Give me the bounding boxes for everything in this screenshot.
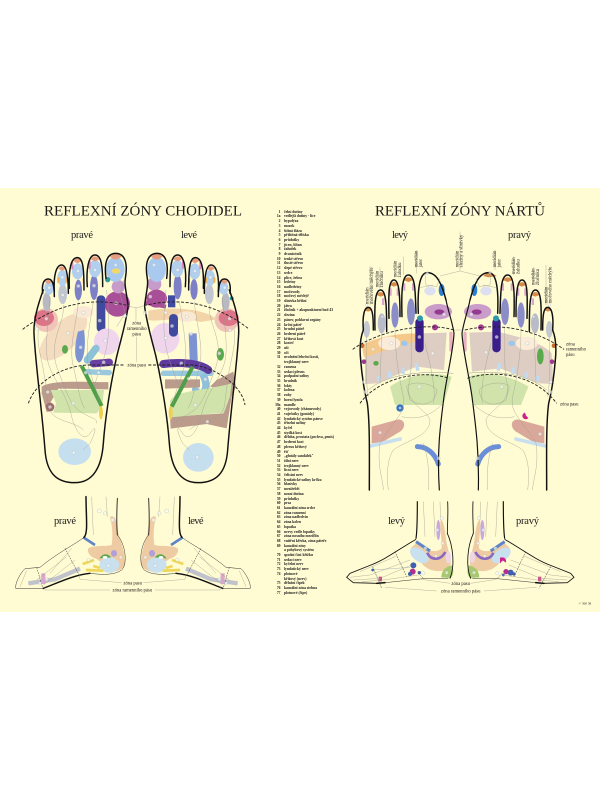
legend list: srdce [284, 271, 292, 275]
label: pravé side: pravé [54, 516, 76, 527]
legend list: mezižebří [284, 487, 299, 491]
waist and shoulder zone lines [353, 232, 564, 403]
legend list: 3 [279, 224, 280, 228]
legend list: příštítná tělíska [284, 233, 309, 237]
meridian labels: močového měchýře [370, 267, 375, 304]
legend list: ledviny [284, 280, 295, 284]
legend list: a pohybový systém [284, 548, 314, 552]
legend list: čelistní nerv [284, 473, 303, 477]
legend list: prsa [284, 501, 291, 505]
legend list: 22 [277, 313, 280, 317]
legend list: 73 [277, 567, 280, 571]
legend list: 45 [277, 431, 280, 435]
legend list: nervy vedle lopatky [284, 530, 315, 534]
legend list: 10 [277, 257, 280, 261]
label: zóna ramenního pásu: pásu [132, 333, 142, 338]
legend list: oči [284, 351, 289, 355]
legend list: 75 [277, 581, 280, 585]
meridian labels: meridián [366, 287, 371, 304]
label: levý: levý [392, 230, 409, 241]
legend list: lymfatický nerv [284, 567, 309, 571]
legend list: kauzální zóna stehna [284, 586, 317, 590]
legend list: 38 [277, 393, 280, 397]
legend list: 52 [277, 464, 280, 468]
legend list: lícní nerv [284, 468, 299, 472]
legend list: 41 [277, 412, 280, 416]
right outer foot [467, 502, 574, 588]
legend list: 27 [277, 337, 280, 341]
legend list: 13 [277, 271, 280, 275]
legend list: podpažní uzliny [284, 374, 309, 378]
legend list: 65 [277, 525, 280, 529]
legend list: 15 [277, 280, 280, 284]
right inner foot [16, 497, 125, 590]
legend list: 71 [277, 558, 280, 562]
legend list: lopatka [284, 525, 296, 529]
legend list: 12 [277, 266, 280, 270]
legend list: žlučník + akupunkturní bod 43 [284, 308, 333, 312]
legend list: řiť [284, 450, 289, 454]
legend list: 1 [279, 210, 280, 214]
legend list: 70 [277, 553, 280, 557]
legend list: kauzální zóna srdce [284, 506, 315, 510]
side views outer [347, 502, 592, 605]
legend list: 46 [277, 435, 280, 439]
legend list: 19 [277, 299, 280, 303]
legend list: močový měchýř [284, 294, 309, 298]
meridian labels: jater [497, 259, 502, 268]
title: nárty: REFLEXNÍ ZÓNY NÁRTŮ [375, 202, 546, 220]
legend list: 60 [277, 501, 280, 505]
meridian labels: žlučníku [536, 268, 541, 285]
legend list: mozek [284, 224, 294, 228]
legend list: 30 [277, 351, 280, 355]
label: zóna ramenního pásu: pásu [566, 353, 575, 358]
meridian labels: meridián [493, 250, 498, 267]
right dorsal zones [463, 273, 556, 464]
legend list: 4 [279, 228, 280, 232]
legend list: 59 [277, 497, 280, 501]
legend list: vejcovody (chámovody) [284, 407, 321, 411]
meridian labels [366, 234, 554, 304]
legend list: 47 [277, 440, 280, 444]
legend list: 37 [277, 388, 280, 392]
legend list: 36 [277, 384, 280, 388]
legend list: 62 [277, 511, 280, 515]
meridian labels: meridián [376, 270, 381, 287]
legend list: děloha, prostata (pochva, penis) [284, 435, 334, 439]
legend list: 35 [277, 379, 280, 383]
legend list: bederní kost [284, 440, 304, 444]
legend list: 29 [277, 346, 280, 350]
side views inner [16, 497, 250, 594]
label: zóna ramenního pásu: zóna [566, 342, 575, 347]
left inner foot [141, 497, 250, 590]
label: pravý side: pravý [516, 516, 540, 527]
legend list: zuby [284, 393, 292, 397]
legend list: 20 [277, 304, 280, 308]
legend list: játra [284, 304, 292, 308]
legend list: močovody [284, 290, 300, 294]
legend list: lymfatický systém pánve [284, 417, 323, 421]
meridian labels: meridián [532, 268, 537, 285]
waist and shoulder zone lines [23, 302, 249, 405]
meridian labels: meridián [512, 257, 517, 274]
legend list: 63 [277, 515, 280, 519]
legend list: 39 [277, 398, 280, 402]
legend list: sedací nerv [284, 558, 302, 562]
title: chodidla: REFLEXNÍ ZÓNY CHODIDEL [44, 202, 242, 220]
label: pravé: pravé [71, 230, 93, 241]
label: zóna pasu: zóna pasu [127, 364, 147, 369]
legend list: 31 [277, 355, 280, 359]
legend list: trojklanný nerv [284, 464, 309, 468]
legend list: 25 [277, 327, 280, 331]
legend list: kolena [284, 388, 294, 392]
label: pravý: pravý [508, 230, 532, 241]
legend list [275, 210, 334, 595]
zone leader lines [385, 579, 537, 591]
legend list: 69 [277, 544, 280, 548]
legend list: dvanáctník [284, 252, 302, 256]
legend list: žaludek [284, 247, 296, 251]
legend list: 2 [279, 219, 280, 223]
legend list: žilní nerv [284, 459, 299, 463]
legend list: 24 [277, 323, 280, 327]
legend list: kyčel [284, 426, 292, 430]
meridian labels: žaludku [398, 262, 403, 277]
legend list: plexus křížový [284, 445, 307, 449]
legend list: kauzální zóny [284, 544, 306, 548]
legend list: plotnové [284, 572, 298, 576]
legend list: tenké střevo [284, 257, 303, 261]
legend list: křížový (nerv) [284, 577, 306, 581]
legend list: průdušky [284, 238, 299, 242]
legend list: tříselní uzliny [284, 421, 306, 425]
legend list: čelní dutiny [284, 210, 303, 214]
meridian labels: jater [419, 259, 424, 268]
meridian labels: meridián [544, 286, 549, 303]
label: zóna ramenního pásu [127, 321, 147, 338]
legend list: nosní dutina [284, 492, 304, 496]
legend list: 53 [277, 468, 280, 472]
legend list: 49 [277, 450, 280, 454]
legend list: hypofýza [284, 219, 298, 223]
meridian labels: sleziny a slinivky [460, 234, 465, 267]
legend list: průdušky [284, 497, 299, 501]
left sole zones [145, 254, 239, 472]
legend list: nadledviny [284, 285, 301, 289]
legend list: 34 [277, 374, 280, 378]
legend list: zóna ramenní [284, 511, 306, 515]
legend list: štítná žláza [284, 228, 302, 232]
legend list: zóna kolen [284, 520, 301, 524]
legend list: 67 [277, 534, 280, 538]
legend list: 58 [277, 492, 280, 496]
sole diagrams [23, 253, 249, 483]
legend list: krční páteř [284, 323, 302, 327]
label: zóna ramenního pásu: ramenního [566, 348, 587, 353]
legend list: 40 [277, 407, 280, 411]
zone leader lines [45, 575, 221, 590]
label: zóna pasu: zóna pasu [451, 582, 471, 587]
left dorsal outline [360, 273, 454, 490]
meridian labels: žlučníku [380, 271, 385, 287]
legend list: horní lymfa [284, 398, 303, 402]
legend list: trojklanný nerv [284, 360, 309, 364]
legend list: 72 [277, 562, 280, 566]
legend list: kyčelní nerv [284, 562, 303, 566]
legend list: uvolnění lebeční kosti, [284, 355, 319, 359]
legend list: plíce, žebra [284, 276, 302, 280]
right dorsal outline [462, 273, 556, 490]
legend list: 76 [277, 586, 280, 590]
label: levé side: levé [188, 516, 204, 527]
legend list: ramena [284, 365, 296, 369]
legend list: 43 [277, 421, 280, 425]
legend list: 8 [279, 247, 280, 251]
legend list: 55 [277, 478, 280, 482]
legend list: 44 [277, 426, 280, 430]
label: zóna ramenního pásu: ramenního [127, 327, 147, 332]
legend list: 48 [277, 445, 280, 449]
background panel [0, 188, 600, 612]
legend list: 33 [277, 370, 280, 374]
legend list: spodní část křížku [284, 553, 313, 557]
legend list: 54 [277, 473, 280, 477]
meridian labels: žaludku [516, 259, 521, 274]
legend list: uši [284, 346, 289, 350]
legend list: 21 [277, 308, 280, 312]
legend list: 7 [279, 243, 280, 247]
legend list: 77 [277, 591, 280, 595]
legend list: zóna nadledvin [284, 515, 308, 519]
legend list: 39a [275, 403, 280, 407]
legend list: 1a [277, 214, 280, 218]
legend list: 23 [277, 318, 280, 322]
legend list: 64 [277, 520, 280, 524]
legend list: 17 [277, 290, 280, 294]
meridian labels: meridián [394, 260, 399, 277]
legend list: 51 [277, 459, 280, 463]
legend list: 57 [277, 487, 280, 491]
meridian labels: močového měchýře [549, 267, 554, 303]
legend list: tlusté střevo [284, 261, 303, 265]
label: levý side: levý [388, 516, 406, 527]
number markers on dorsal feet [362, 271, 552, 460]
label: zóna pasu: zóna pasu [123, 581, 143, 586]
right sole zones [32, 254, 130, 465]
legend list: hlasivky [284, 482, 297, 486]
legend list: zóna nosního mezičlín [284, 534, 319, 538]
label: zóna ramenního pásu: zóna ramenního pásu [113, 589, 153, 594]
meridian labels: meridián [415, 250, 420, 267]
legend list: sedací plexus [284, 370, 305, 374]
legend list: 18 [277, 294, 280, 298]
left outer foot [347, 502, 453, 588]
legend list: 42 [277, 417, 280, 421]
legend list: vnitřní křivka, zóna páteře [284, 539, 326, 543]
legend list: „glutály sandálek" [284, 454, 314, 458]
legend list: 32 [277, 365, 280, 369]
legend list: 68 [277, 539, 280, 543]
legend list: slinivka břišní [284, 299, 306, 303]
copyright mark: © 500 58 [579, 600, 592, 605]
legend list: slepé střevo [284, 266, 302, 270]
label: zóna ramenního pásu [566, 342, 587, 358]
legend list: 26 [277, 332, 280, 336]
legend list: pánev, pohlavní orgány [284, 318, 321, 322]
number markers on soles [35, 263, 232, 459]
label: levé: levé [181, 230, 197, 241]
legend list: 28 [277, 341, 280, 345]
legend list: lokty [284, 384, 292, 388]
meridian labels: meridián [455, 250, 460, 267]
legend list: plotnové (čípe) [284, 591, 307, 595]
dorsal diagrams [353, 232, 587, 490]
label: zóna pasu: zóna pasu [560, 402, 579, 407]
legend list: 74 [277, 572, 280, 576]
legend list: 11 [277, 261, 280, 265]
legend list: 50 [277, 454, 280, 458]
legend list: hrudník [284, 379, 297, 383]
legend list: 61 [277, 506, 280, 510]
legend list: lymfatické uzliny krčku [284, 478, 322, 482]
legend list: děložní čípek [284, 581, 305, 585]
legend list: hrudní páteř [284, 327, 304, 331]
legend list: 5 [279, 233, 280, 237]
label: zóna ramenního pásu: zóna [132, 321, 141, 326]
legend list: slezina [284, 313, 295, 317]
left sole outline [145, 253, 239, 483]
legend list: vedlejší dutiny - líce [284, 214, 315, 218]
legend list: stydká kost [284, 431, 302, 435]
legend list: 14 [277, 276, 280, 280]
label: zóna ramenního pásu: zóna ramenního pásu [441, 590, 481, 595]
legend list: 16 [277, 285, 280, 289]
legend list: kostrč [284, 341, 294, 345]
left dorsal zones [360, 277, 453, 464]
legend list: 56 [277, 482, 280, 486]
legend list: vaječníky (gonády) [284, 412, 314, 416]
legend list: mandle [284, 403, 296, 407]
legend list: křížová kost [284, 337, 303, 341]
legend list: 66 [277, 530, 280, 534]
legend list: 9 [279, 252, 280, 256]
legend list: 6 [279, 238, 280, 242]
legend list: bederní páteř [284, 332, 305, 336]
right sole outline [34, 253, 128, 483]
legend list: jícen, hltan [284, 243, 302, 247]
